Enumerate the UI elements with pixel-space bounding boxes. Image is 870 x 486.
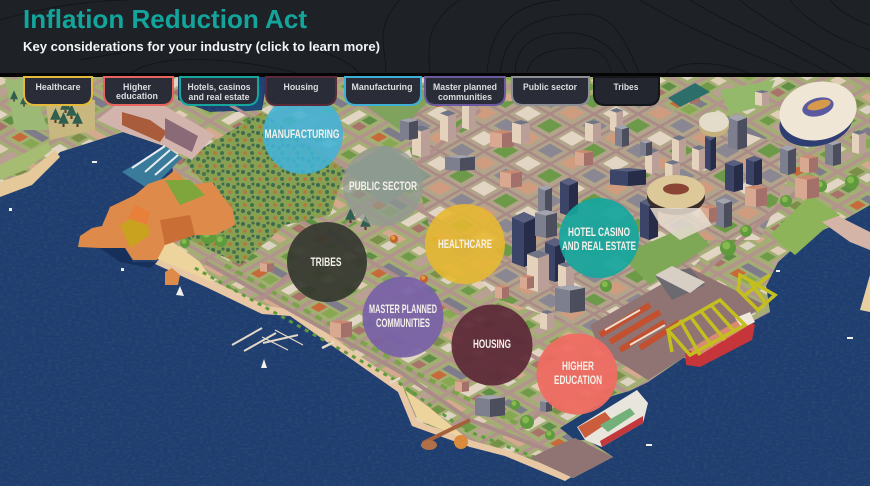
circle: master planned communities: COMMUNITIES [376, 318, 430, 330]
cargo port [590, 266, 765, 380]
domed arena [647, 175, 712, 240]
promenade road and palms along the shore [195, 262, 560, 465]
circle: master planned communities [362, 276, 444, 358]
circle: higher education: EDUCATION [554, 375, 602, 387]
circle: manufacturing [263, 94, 343, 174]
tab: housing [266, 77, 336, 105]
road network [170, 105, 810, 430]
water treatment ponds [668, 83, 710, 107]
tab: public sector: Public sector [523, 82, 577, 92]
container ship [685, 312, 755, 367]
subtitle: Key considerations for your industry (click to learn more) [23, 39, 380, 54]
tab: master planned communities: Master planned [433, 82, 497, 92]
circle: healthcare [425, 204, 505, 284]
tab: hotels, casinos and real estate: Hotels, casinos [188, 82, 250, 92]
tab: higher education: Higher [123, 82, 151, 92]
stadium [774, 75, 862, 153]
tab: tribes: Tribes [614, 82, 638, 92]
circle: tribes: TRIBES [310, 257, 342, 269]
small boats [9, 161, 853, 446]
public sector grey block [345, 145, 430, 205]
tab: master planned communities [425, 77, 505, 105]
circle: housing: HOUSING [473, 339, 511, 351]
tab: manufacturing [345, 77, 421, 105]
orange rock headland [78, 170, 235, 285]
yellow gantry cranes [668, 275, 775, 355]
tab: healthcare [24, 77, 92, 105]
title: Inflation Reduction Act [23, 4, 307, 34]
tab: master planned communities: communities [438, 92, 492, 102]
circle: hotel casino and real estate [559, 198, 639, 278]
tab: public sector [512, 77, 589, 105]
tab: higher education [104, 77, 173, 105]
tab: healthcare: Healthcare [36, 82, 80, 92]
header band [0, 0, 870, 77]
circle: hotel casino and real estate: HOTEL CASINO [568, 227, 630, 239]
circle: hotel casino and real estate: AND REAL ESTATE [562, 241, 636, 253]
circle: healthcare: HEALTHCARE [438, 239, 492, 251]
circle: higher education [536, 334, 618, 414]
circle: housing [452, 304, 532, 386]
circle: higher education: HIGHER [562, 361, 594, 373]
tab: hotels, casinos and real estate [180, 77, 258, 105]
city towers [260, 85, 866, 417]
ferry dock and ferry [530, 388, 650, 478]
circle: public sector: PUBLIC SECTOR [349, 181, 417, 193]
round pavilion [699, 112, 729, 137]
beach pier [421, 420, 470, 450]
tab: manufacturing: Manufacturing [352, 82, 412, 92]
tab: tribes [594, 77, 659, 105]
marina and piers [232, 216, 870, 383]
circle: master planned communities: MASTER PLANNED [369, 304, 437, 316]
tab: housing: Housing [284, 82, 318, 92]
tab: hotels, casinos and real estate: and real estate [188, 92, 250, 102]
circle: manufacturing: MANUFACTURING [264, 129, 340, 141]
circle: tribes [287, 222, 367, 302]
hydroelectric dam [97, 100, 215, 190]
green parks and forest [5, 78, 859, 440]
circle: public sector [343, 146, 423, 226]
tab: higher education: education [116, 91, 158, 101]
